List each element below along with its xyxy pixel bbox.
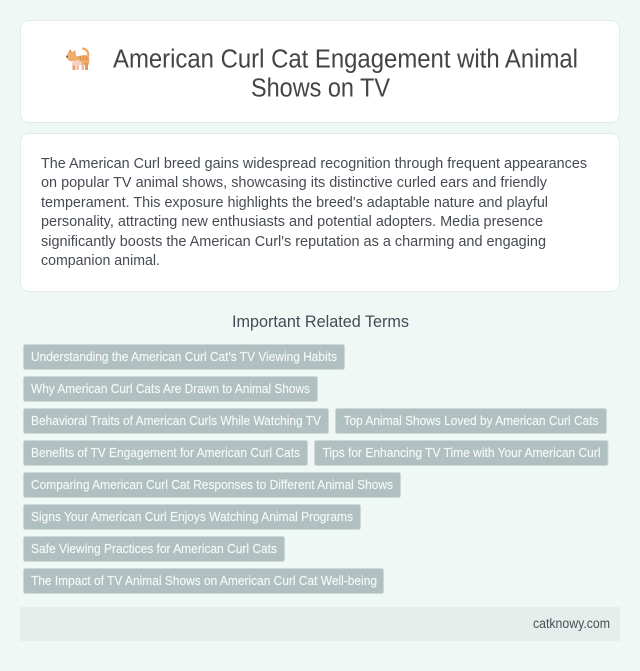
tag: Tips for Enhancing TV Time with Your American Curl xyxy=(322,446,600,460)
tag xyxy=(24,344,344,370)
title xyxy=(113,46,578,102)
tag xyxy=(336,408,606,434)
tag xyxy=(24,440,308,466)
tag: Understanding the American Curl Cat's TV Viewing Habits xyxy=(31,350,337,364)
panel: description xyxy=(20,134,620,292)
title: American Curl Cat Engagement with Animal xyxy=(113,46,578,74)
tag xyxy=(314,440,608,466)
description text: temperament. This exposure highlights the breed's adaptable nature and playful xyxy=(41,194,548,211)
tag xyxy=(24,376,318,402)
tag: Top Animal Shows Loved by American Curl Cats xyxy=(344,414,598,428)
footer text: source: catknowy.com xyxy=(533,616,610,631)
footer xyxy=(20,607,620,641)
header panel xyxy=(20,20,620,122)
description text xyxy=(41,155,587,269)
tag: Benefits of TV Engagement for American Curl Cats xyxy=(31,446,300,460)
description text: companion animal. xyxy=(41,252,160,269)
tag: Why American Curl Cats Are Drawn to Animal Shows xyxy=(31,382,310,396)
description text: significantly boosts the American Curl's reputation as a charming and engaging xyxy=(41,233,546,250)
tag xyxy=(24,408,328,434)
description text: on popular TV animal shows, showcasing its distinctive curled ears and friendly xyxy=(41,174,547,191)
tag: Signs Your American Curl Enjoys Watching Animal Programs xyxy=(31,510,353,524)
tag list xyxy=(24,344,608,594)
heading: important related terms: Important Related Terms xyxy=(232,313,409,331)
tag xyxy=(24,472,400,498)
tag: Safe Viewing Practices for American Curl Cats xyxy=(31,542,277,556)
tag: Behavioral Traits of American Curls While Watching TV xyxy=(31,414,322,428)
description text: The American Curl breed gains widespread recognition through frequent appearances xyxy=(41,155,587,172)
description text: personality, attracting new enthusiasts and potential adopters. Media presence xyxy=(41,213,543,230)
tag xyxy=(24,568,384,594)
icon: cat xyxy=(66,48,89,70)
tag xyxy=(24,504,360,530)
title: Shows on TV xyxy=(251,74,390,102)
tag xyxy=(24,536,284,562)
tag: The Impact of TV Animal Shows on American Curl Cat Well-being xyxy=(31,574,377,588)
tag: Comparing American Curl Cat Responses to Different Animal Shows xyxy=(31,478,393,492)
